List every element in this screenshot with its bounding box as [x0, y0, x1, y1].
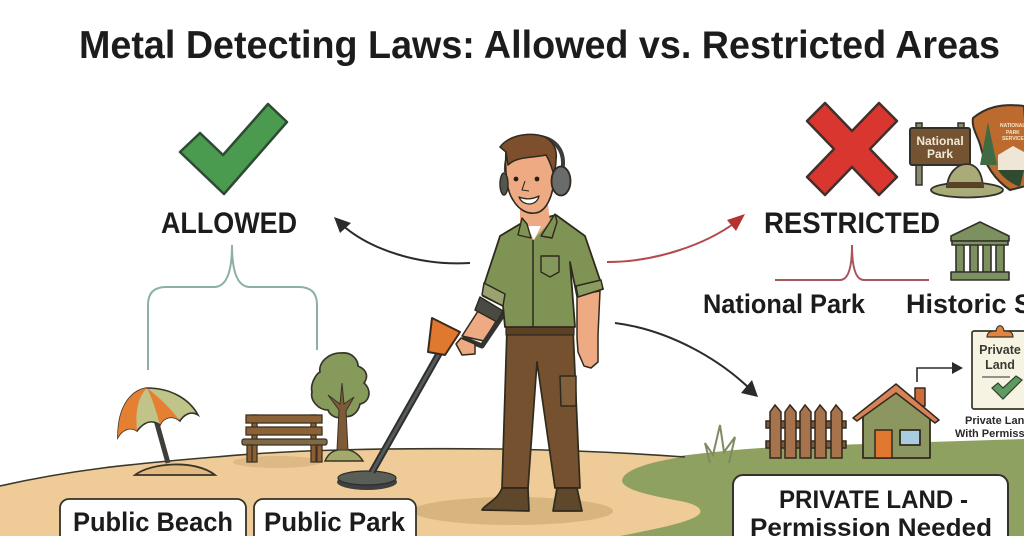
- detector grip and arm brace: [462, 312, 505, 346]
- bracket: restricted: [775, 245, 929, 280]
- arrow: man to allowed: [334, 217, 470, 263]
- arm band: [475, 297, 503, 322]
- left boot: [482, 488, 529, 511]
- heading: allowed: ALLOWED: [161, 207, 297, 240]
- placket: [532, 240, 534, 327]
- cargo pocket: [560, 376, 576, 406]
- icon: permission clipboard: [972, 326, 1024, 409]
- ground: private land grass: [600, 439, 1024, 536]
- caption: private land with permission: [955, 415, 1024, 440]
- trousers: [502, 328, 580, 488]
- chest pocket: [541, 256, 559, 277]
- nose: [522, 181, 529, 191]
- belt: [506, 327, 574, 335]
- icon: wooden fence: [766, 405, 846, 458]
- label box: private land permission needed: PRIVATE LAND -: [779, 486, 968, 514]
- right boot: [553, 488, 582, 511]
- hair: [500, 134, 556, 172]
- icon: ranger hat: [931, 164, 1003, 198]
- smile: [519, 196, 539, 204]
- icon: beach umbrella: [118, 388, 215, 475]
- icon: national park sign: [910, 123, 970, 185]
- icon: national park sign: National: [916, 134, 964, 148]
- arrow: man to restricted: [607, 214, 745, 262]
- headphone cup right: [552, 166, 570, 196]
- eyes: [514, 177, 518, 181]
- title: Metal Detecting Laws: Allowed vs. Restricted Areas: [79, 24, 1000, 67]
- man shadow: [413, 497, 613, 525]
- hand on grip: [456, 338, 475, 355]
- label box: private land permission needed: [733, 475, 1008, 536]
- label: national park: National Park: [703, 289, 866, 319]
- icon: park service arrowhead badge: SERVICE: [1002, 136, 1024, 142]
- arrow: man to private land: [615, 323, 758, 397]
- icon: park service arrowhead badge: PARK: [1006, 130, 1020, 136]
- left forearm: [462, 308, 498, 341]
- shirt: [483, 215, 603, 327]
- face: [506, 148, 554, 213]
- collar: [518, 214, 557, 238]
- headphone cup left: [500, 173, 508, 195]
- right cuff: [576, 280, 603, 297]
- heading: restricted: RESTRICTED: [764, 207, 940, 240]
- metal detector: [337, 318, 460, 490]
- neck and undershirt: [520, 205, 550, 240]
- ground: sand path: [0, 449, 700, 536]
- icon: permission clipboard: Land: [985, 358, 1015, 372]
- icon: historic building: [951, 222, 1009, 280]
- bracket: allowed: [148, 245, 317, 370]
- icon: park service arrowhead badge: [973, 105, 1024, 190]
- man: [456, 134, 603, 511]
- left cuff: [482, 283, 505, 306]
- icon: house: [853, 384, 939, 458]
- icon: park bench: [242, 415, 327, 462]
- icon: red cross: [807, 103, 897, 195]
- icon: national park sign: Park: [927, 147, 953, 161]
- icon: permission clipboard: Private: [979, 343, 1021, 357]
- headphone band: [506, 137, 563, 172]
- icon: tree: [312, 353, 369, 461]
- right arm: [577, 291, 600, 368]
- arrow: house to permission document: [917, 362, 963, 382]
- icon: grass tuft: [705, 425, 735, 463]
- bench shadow: [233, 456, 321, 468]
- icon: green check mark: [180, 104, 287, 194]
